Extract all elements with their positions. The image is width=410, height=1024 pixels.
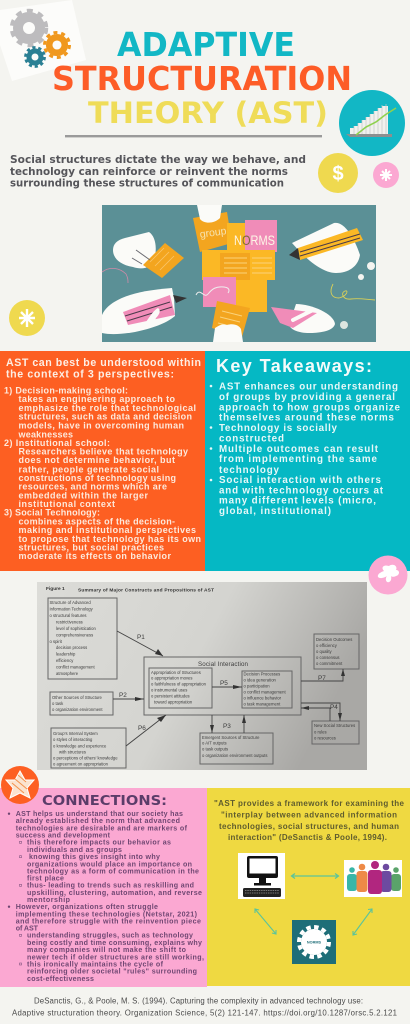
arrow: computer to norms — [255, 909, 276, 934]
subtitle: Social structures dictate the way we behave, and — [10, 153, 306, 166]
box: group's internal system: o knowledge and experience — [53, 744, 107, 748]
box: structure of advanced information technology: o structural features — [50, 613, 87, 618]
title — [52, 25, 352, 130]
box: decision outcomes: o efficiency — [316, 643, 338, 648]
box: group's internal system — [51, 728, 126, 768]
panel: key takeaways — [205, 351, 410, 571]
box: other sources of structure: o organization environment — [52, 707, 103, 712]
takeaway bullets: global, institutional) — [219, 506, 331, 517]
box: decision processes: o participation — [244, 684, 270, 688]
perspective text: 1) Decision-making school: — [4, 386, 128, 396]
perspective text: rather, people generate social — [18, 464, 159, 474]
box: structure of advanced information technology: level of sophistication — [56, 626, 96, 631]
box: decision outcomes: o commitment — [316, 661, 343, 666]
perspective text: emphasize the role that technological — [18, 403, 196, 413]
box: decision processes: o influence behavior — [244, 696, 282, 700]
figure title: Summary of Major Constructs and Propositions of AST — [78, 588, 214, 594]
box: structure of advanced information technology: atmosphere — [56, 671, 79, 676]
box: appropriation of structures: o appropriation moves — [151, 676, 192, 680]
perspective text: to propose that technology has its own — [18, 534, 201, 544]
box: structure of advanced information technology: efficiency — [56, 658, 74, 663]
illustration: group norms — [102, 205, 376, 342]
icon: dollar circle — [318, 153, 358, 193]
box: decision processes — [242, 671, 292, 708]
heading: key takeaways: Key Takeaways: — [216, 356, 372, 376]
figure: summary of major constructs and propositions of AST — [37, 582, 367, 770]
perspective text: models, have in overcoming human — [18, 420, 184, 430]
perspective text: constructions of technology using — [18, 473, 176, 483]
perspective text: 3) Social Technology: — [4, 508, 100, 518]
arrows and proposition labels: P2 — [119, 692, 127, 699]
subtitle: technology can reinforce or reinvent the norms — [10, 165, 288, 178]
hand: bottom — [213, 324, 243, 342]
hand: lower right with pink note — [271, 304, 335, 333]
box: structure of advanced information technology: restrictiveness — [56, 620, 83, 624]
box: structure of advanced information technology: leadership — [56, 652, 76, 656]
connections text — [16, 810, 204, 983]
takeaway bullets — [210, 382, 401, 517]
perspective text: making and institutional perspectives — [18, 525, 196, 535]
quote: "interplay between advanced information — [221, 810, 397, 820]
connections text: AST helps us understand that our society has — [16, 810, 183, 818]
box: structure of advanced information technology: Structure of Advanced — [50, 600, 91, 605]
arrow: computer to people — [292, 874, 338, 878]
hand: upper left with note — [113, 232, 184, 278]
box: structure of advanced information technology: comprehensiveness — [56, 632, 93, 638]
icon: pink flower circle — [368, 556, 408, 594]
sticky note: group: group — [199, 225, 227, 241]
connections text: of AST — [16, 925, 39, 933]
box: new social structures: o rules — [314, 730, 327, 734]
connections text: implementing these technologies (Netstar, 2021) — [16, 910, 198, 918]
box: structure of advanced information technology: Information Technology — [50, 606, 94, 612]
icon: yellow asterisk circle — [9, 300, 45, 336]
arrows and proposition labels: P4 — [330, 704, 338, 711]
box: emergent sources of structure — [200, 733, 273, 764]
box: group's internal system: o styles of interacting — [53, 737, 93, 742]
box: group's internal system: Group's Internal System — [53, 731, 98, 736]
takeaway bullets: approach to how groups organize — [219, 402, 401, 413]
box: emergent sources of structure: o organization environment outputs — [202, 753, 267, 758]
takeaway bullets: constructed — [219, 434, 284, 444]
takeaway bullets: Multiple outcomes can result — [219, 444, 379, 455]
citation — [12, 996, 397, 1018]
arrows and proposition labels: P1 — [137, 634, 145, 641]
connections text: first place — [27, 875, 64, 883]
heading: perspectives: AST can best be understood within — [6, 357, 201, 369]
panel: framework quote and diagram — [207, 788, 410, 986]
takeaway bullets: many different levels (micro, — [219, 496, 376, 506]
box: decision processes: o task management — [244, 702, 281, 706]
box: decision outcomes: o consensus — [316, 655, 340, 660]
perspective text: structures, such as data and decision — [18, 412, 192, 422]
arrows and proposition labels — [113, 631, 345, 746]
quote: "AST provides a framework for examining the — [214, 799, 405, 808]
connections text: already established the norm that advanced — [16, 817, 180, 825]
perspective text: weaknesses — [18, 429, 73, 439]
connections text: understanding struggles, such as technology — [27, 932, 193, 940]
connections text: reinforcing older societal "rules" surrounding — [27, 968, 197, 976]
box: appropriation of structures — [149, 668, 212, 708]
title: STRUCTURATION — [52, 60, 352, 98]
sticky note: group — [193, 212, 232, 252]
citation: Adaptive structuration theory. Organization Science, 5(2) 121-147. https://doi.org/10.1287/orsc.5.2.121 — [12, 1008, 397, 1018]
box: emergent sources of structure: o task outputs — [202, 746, 228, 752]
connections bullets — [8, 812, 22, 965]
icon: people — [344, 860, 402, 897]
icon: gears on white card — [0, 0, 86, 81]
connections text: many companies will not make the shift to — [27, 946, 187, 954]
box: appropriation of structures: Appropriation of Structures — [151, 670, 201, 675]
box: other sources of structure — [50, 692, 113, 715]
perspective text: takes an engineering approach to — [18, 394, 176, 404]
connections text: newer tech if older structures are still working, — [27, 953, 204, 961]
box: group's internal system: o agreement on appropriation — [53, 762, 109, 766]
connections text: cost-effectiveness — [27, 975, 94, 983]
quote — [214, 799, 405, 842]
perspective text: institutional context — [18, 499, 115, 509]
box: structure of advanced information technology: conflict management — [56, 664, 95, 669]
heading: perspectives — [6, 357, 201, 380]
arrows and proposition labels: P6 — [138, 725, 146, 732]
perspective text: 2) Institutional school: — [4, 438, 110, 448]
icon: dollar circle: $ — [332, 163, 344, 185]
box: new social structures: o resources — [314, 736, 336, 740]
icon: norms gear: NORMS — [307, 940, 322, 944]
connections text: technologies are desirable and are markers of — [16, 824, 188, 832]
box: structure of advanced information technology: o spirit — [50, 639, 63, 644]
perspective text: resources, and norms which are — [18, 482, 167, 492]
perspective text: embedded within the larger — [18, 490, 148, 500]
citation: DeSanctis, G., & Poole, M. S. (1994). Capturing the complexity in advanced technology use: — [34, 996, 363, 1006]
connections text: this therefore impacts our behavior as — [27, 839, 171, 847]
box: decision processes: o conflict management — [244, 690, 286, 694]
icon: pink asterisk circle — [373, 162, 399, 188]
connections text: organizations would place an importance on — [27, 860, 192, 868]
box: decision outcomes: o quality — [316, 649, 333, 654]
box: appropriation of structures: o faithfulness of appropriation — [151, 682, 207, 686]
box: other sources of structure: Other Sources of Structure — [52, 695, 102, 700]
perspective text: moderate its effects on behavior — [18, 551, 171, 561]
box: structure of advanced information technology — [48, 598, 117, 679]
box: decision outcomes: Decision Outcomes — [316, 637, 352, 642]
title: THEORY (AST) — [88, 96, 328, 130]
hand: top — [197, 205, 222, 223]
box: group's internal system: with structures — [59, 750, 86, 754]
box: appropriation of structures: o persistent attitudes — [151, 694, 190, 698]
quote: technologies, social structures, and human — [219, 822, 399, 831]
panel: connections — [0, 788, 207, 987]
perspective text — [4, 386, 201, 561]
arrows and proposition labels: P7 — [318, 675, 326, 682]
icon: orange star circle — [1, 766, 39, 804]
takeaway bullets: AST enhances our understanding — [219, 382, 398, 392]
perspective text: does not determine behavior, but — [18, 455, 175, 465]
connections text: mentorship — [27, 896, 71, 904]
box: group's internal system: o perceptions of others' knowledge — [53, 756, 118, 760]
connections text: being costly and time consuming, explains why — [27, 939, 202, 947]
takeaway bullets: of groups by providing a general — [219, 392, 395, 403]
takeaway bullets: from implementing the same — [219, 454, 378, 465]
box: appropriation of structures: toward appropriation — [154, 700, 193, 704]
box: social interaction — [144, 657, 301, 715]
takeaway bullets: Social interaction with others — [219, 475, 382, 486]
connections text: upskilling, clustering, automation, and reverse — [27, 889, 202, 897]
quote: interaction" (DeSanctis & Poole, 1994). — [228, 833, 387, 842]
box: social interaction: Social Interaction — [198, 661, 249, 668]
figure title — [46, 586, 214, 594]
connections text: success and development — [16, 832, 111, 840]
perspective text: structures, but social practices — [18, 542, 164, 552]
box: decision processes: o idea generation — [244, 678, 277, 682]
panel: three perspectives — [0, 351, 205, 571]
connections text: and therefore struggle with the reinvention piece — [16, 917, 201, 925]
box: other sources of structure: o task — [52, 701, 64, 706]
takeaway bullets: technology — [219, 465, 280, 476]
box: new social structures: New Social Structures — [314, 723, 355, 728]
connections text: However, organizations often struggle — [16, 903, 158, 911]
connections text: technology as a form of communication in the — [27, 867, 199, 875]
subtitle — [10, 153, 306, 190]
box: emergent sources of structure: Emergent Sources of Structure — [202, 735, 260, 740]
hand: upper right with pencil — [289, 223, 363, 273]
takeaway bullets: and with technology occurs at — [219, 485, 384, 496]
box: structure of advanced information technology: decision process — [56, 645, 87, 650]
hand: lower left with pink note — [102, 288, 187, 334]
arrows and proposition labels: P5 — [220, 680, 228, 687]
takeaway bullets: themselves around these norms — [219, 413, 395, 424]
connections text: individuals and as groups — [27, 846, 122, 854]
icon: growth chart in teal circle — [339, 90, 405, 156]
icon: computer — [238, 853, 285, 899]
box: emergent sources of structure: o AIT outputs — [202, 740, 227, 746]
arrow: people to norms — [353, 909, 372, 935]
connections text: this ironically maintains the cycle of — [27, 960, 164, 968]
box: appropriation of structures: o instrumental uses — [151, 688, 187, 692]
box: new social structures — [312, 721, 359, 744]
perspective text: Researchers believe that technology — [18, 446, 188, 456]
perspective text: combines aspects of the decision- — [18, 516, 175, 526]
takeaway bullets: Technology is socially — [219, 423, 338, 434]
norms label: NORMS — [234, 232, 275, 248]
heading: perspectives: the context of 3 perspectives: — [6, 368, 174, 380]
box: decision processes: Decision Processes — [244, 672, 280, 676]
box: decision outcomes — [314, 634, 359, 669]
subtitle: surrounding these structures of communication — [10, 176, 284, 190]
connections text: knowing this gives insight into why — [29, 853, 160, 861]
arrows and proposition labels: P3 — [223, 723, 231, 730]
heading: connections: CONNECTIONS: — [42, 793, 167, 809]
connections text: thus- leading to trends such as reskilling and — [27, 882, 194, 890]
icon: norms gear — [292, 920, 336, 964]
title: ADAPTIVE — [117, 25, 295, 64]
figure title: Figure 1 — [46, 586, 65, 592]
